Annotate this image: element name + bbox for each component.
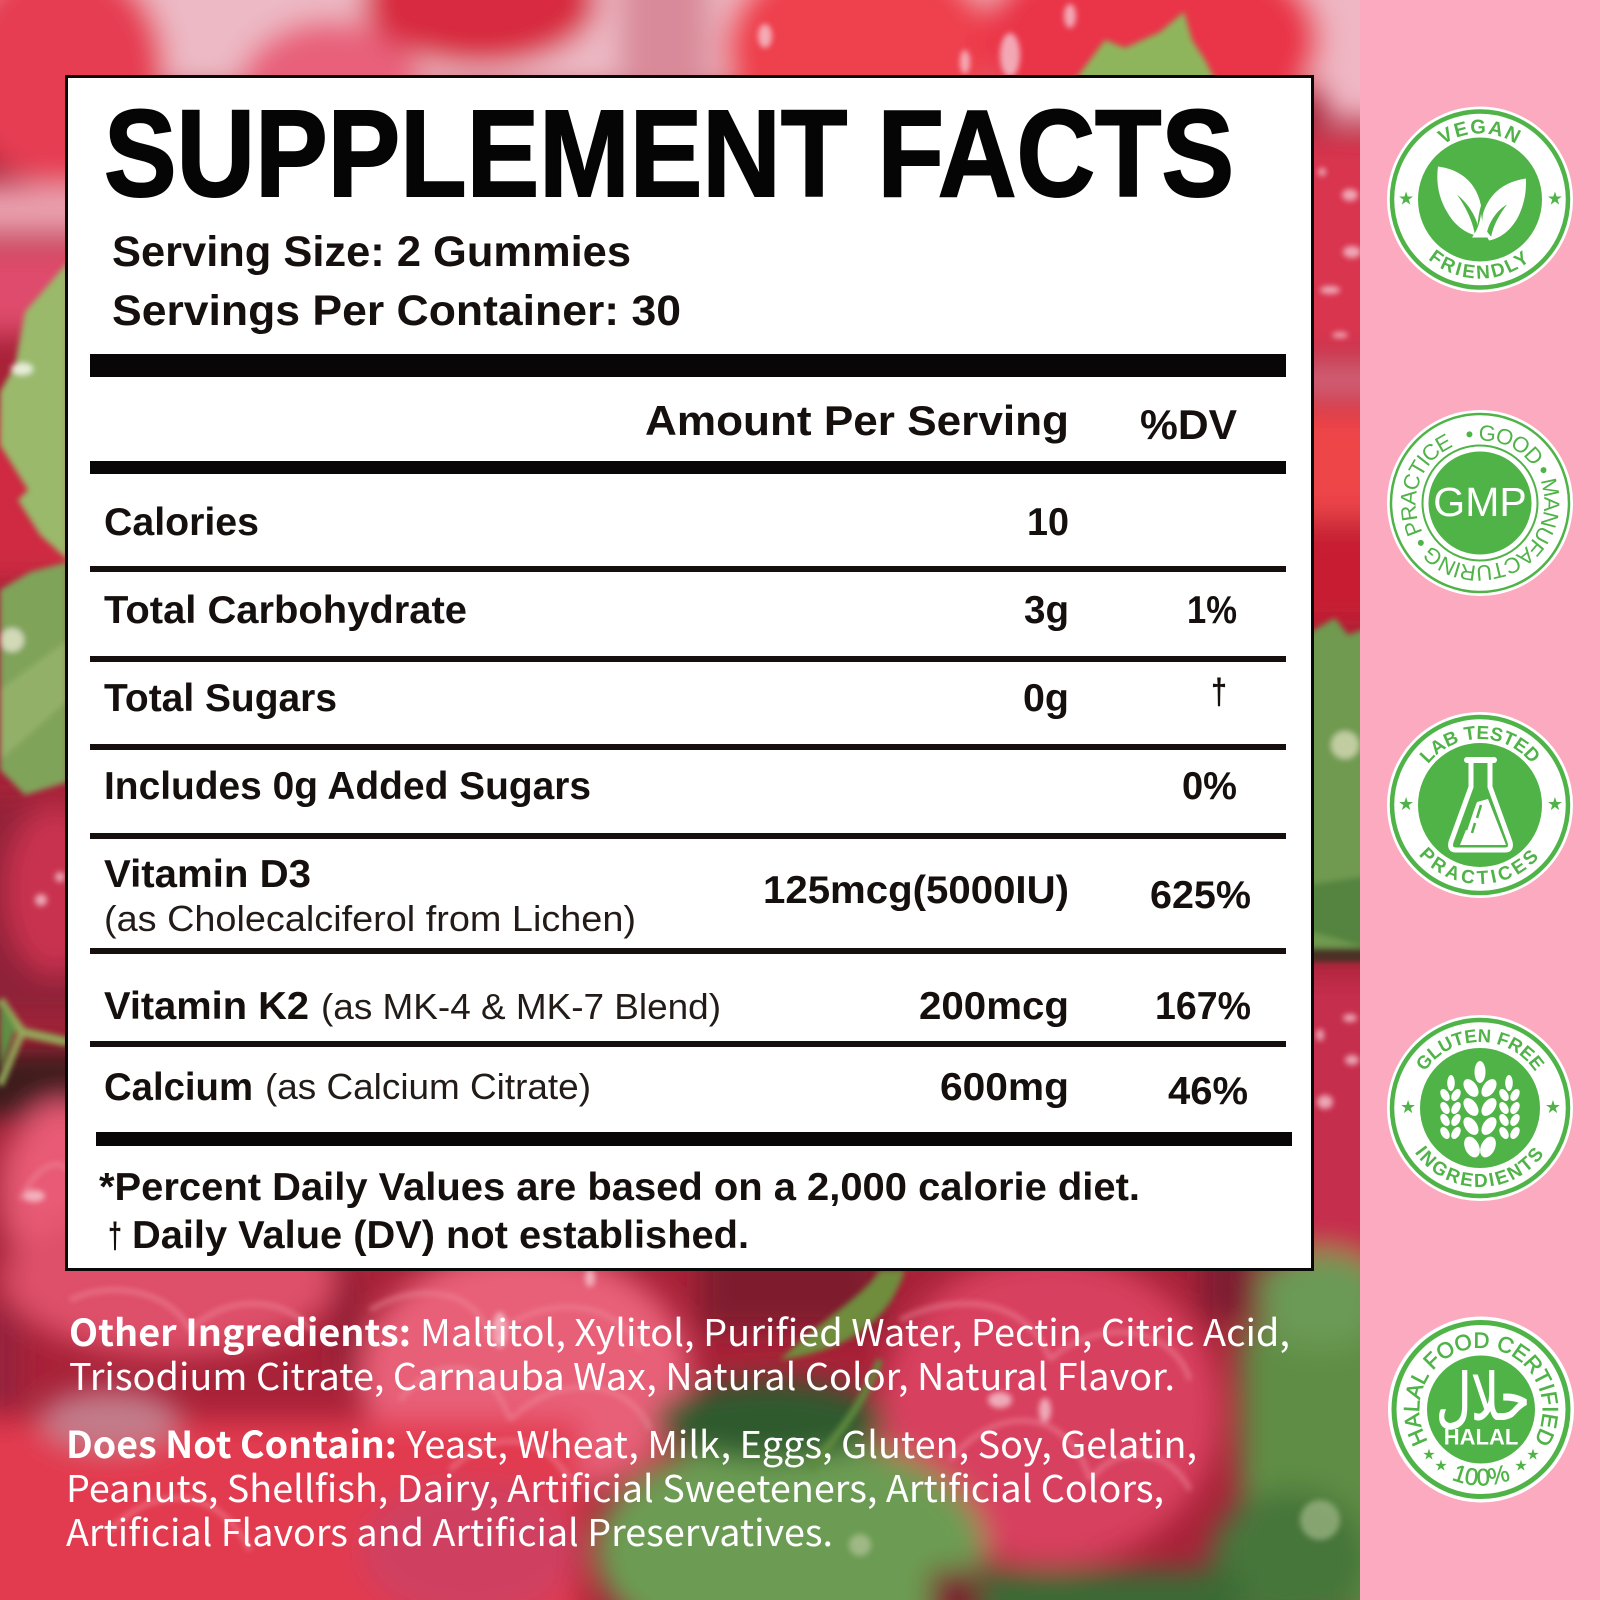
badge: lab tested practices: ★ [1398,794,1414,815]
left leaf upper [0,262,68,560]
bottom stem and leaf [780,1270,905,1360]
column headers: %DV [1140,401,1237,448]
badge: gluten free ingredients: INGREDIENTS [1415,1146,1542,1188]
badge: halal food certified: 100% [1452,1465,1510,1486]
serving information: Serving Size: 2 Gummies [112,228,631,276]
badge: gluten free ingredients: ★ [1400,1097,1416,1118]
row: vitamin d3: 625% [1150,874,1251,917]
badge: halal food certified: ★ [1526,1446,1540,1464]
badge: vegan friendly: ★ [1547,188,1563,210]
right leaf [1305,618,1375,950]
other ingredients text: Maltitol, Xylitol, Purified Water, Pectin, Citric Acid, [420,1303,1290,1357]
row: calories [104,501,1069,544]
badge: gluten free ingredients: GLUTEN FREE [1417,1029,1545,1071]
badge: gluten free ingredients: ★ [1545,1097,1561,1118]
row: vitamin k2: (as MK-4 & MK-7 Blend) [321,986,721,1027]
row: calcium: (as Calcium Citrate) [265,1066,591,1107]
badge: halal food certified [1388,1316,1574,1502]
icon: arabic halal: حلال [1436,1361,1530,1435]
does not contain text: Yeast, Wheat, Milk, Eggs, Gluten, Soy, Gelatin, [405,1415,1197,1469]
droplets [1331,731,1359,759]
row: total sugars [104,671,1227,720]
leaf tip top [1075,12,1215,80]
row: vitamin d3: (as Cholecalciferol from Lichen) [104,898,636,939]
column headers: Amount Per Serving [645,397,1069,444]
badge: good manufacturing practice: GMP [1433,479,1527,525]
icon: leaves [1437,166,1526,240]
left leaf lower [0,562,68,795]
row: calcium: Calcium [104,1066,253,1109]
row: added sugars: 0% [1182,765,1237,808]
column headers [645,397,1237,448]
badge: lab tested practices: PRACTICES [1419,846,1538,884]
panel: supplement facts table [66,76,1312,1270]
row: total sugars: Total Sugars [104,677,337,720]
serving information [112,228,681,335]
badge: lab tested practices [1387,712,1573,898]
does not contain text: Artificial Flavors and Artificial Preservatives. [66,1503,833,1557]
row: total carbohydrate [104,589,1237,632]
serving information: Servings Per Container: 30 [112,287,681,335]
does not contain text [66,1415,1197,1557]
row: total sugars: † [1211,671,1227,712]
row: added sugars [104,765,1237,808]
footnotes: † [108,1215,122,1256]
other ingredients text [69,1303,1290,1401]
row: calories: Calories [104,501,259,544]
does not contain text: Does Not Contain: [66,1415,397,1469]
footnotes [99,1166,1140,1257]
icon: flask [1451,760,1510,850]
does not contain text: Peanuts, Shellfish, Dairy, Artificial Sweeteners, Artificial Colors, [66,1459,1164,1513]
badge: lab tested practices: ★ [1547,794,1563,815]
row: vitamin k2: Vitamin K2 [104,985,309,1028]
badge: gluten free ingredients [1387,1015,1573,1201]
badge: halal food certified: ★ [1514,1456,1528,1474]
icon: wheat [1438,1061,1522,1160]
row: vitamin k2: 200mcg [919,985,1069,1028]
row: total carbohydrate: 3g [1024,589,1069,632]
left stem [0,1000,68,1042]
badge: vegan friendly [1387,106,1573,292]
side panel [1360,0,1600,1600]
halal label: HALAL [1444,1424,1518,1450]
row: total carbohydrate: 1% [1187,589,1237,632]
badge: vegan friendly: VEGAN [1436,120,1521,144]
row: total sugars: 0g [1023,677,1069,720]
row: vitamin k2: 167% [1155,985,1251,1028]
berry segments [20,1164,1190,1550]
badge: halal food certified: ★ [1434,1456,1448,1474]
other ingredients text: Trisodium Citrate, Carnauba Wax, Natural Color, Natural Flavor. [69,1347,1175,1401]
badge: halal food certified: HALAL FOOD CERTIFIED [1404,1332,1558,1446]
row: calories: 10 [1027,501,1069,544]
footnotes: *Percent Daily Values are based on a 2,000 calorie diet. [99,1166,1140,1209]
row: calcium: 46% [1168,1070,1248,1113]
row: calcium: 600mg [940,1066,1069,1109]
footnotes: Daily Value (DV) not established. [132,1214,749,1257]
badge: lab tested practices: LAB TESTED [1419,726,1539,764]
row: calcium [104,1066,1248,1113]
berry highlights [23,4,1361,1422]
title: SUPPLEMENT FACTS [104,86,1234,223]
row: total carbohydrate: Total Carbohydrate [104,589,467,632]
row: added sugars: Includes 0g Added Sugars [104,765,591,808]
other ingredients text: Other Ingredients: [69,1303,411,1357]
badge: vegan friendly: ★ [1398,188,1414,210]
row: vitamin d3: 125mcg(5000IU) [763,869,1069,912]
row: vitamin d3: Vitamin D3 [104,853,311,896]
row: vitamin k2 [104,985,1251,1028]
badge: vegan friendly: FRIENDLY [1429,249,1526,279]
row: vitamin d3 [104,853,1251,939]
badge: good manufacturing practice: • GOOD • MANUFACTURING • PRACTICE [1400,425,1560,581]
badge: halal food certified: ★ [1422,1446,1436,1464]
